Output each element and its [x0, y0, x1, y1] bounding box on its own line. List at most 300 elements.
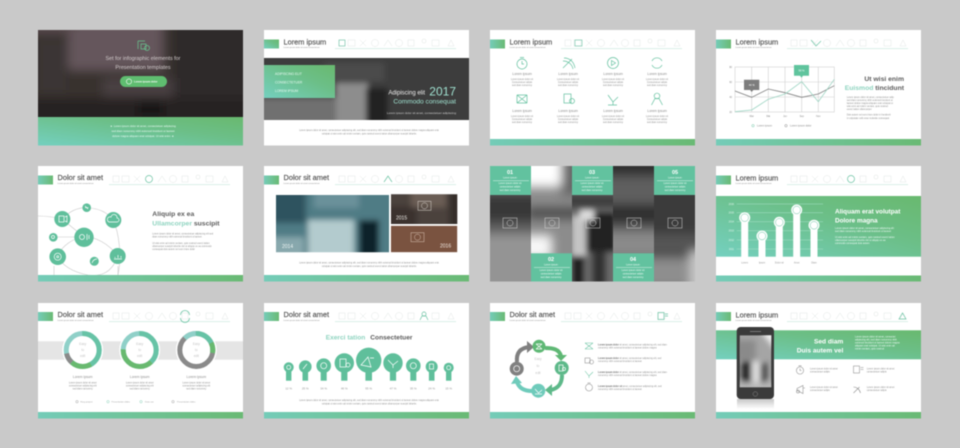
body text: Lorem ipsum dolor sit amet, consectetuer adipiscing elit	[835, 227, 894, 230]
card 05: Lorem ipsum	[668, 176, 682, 180]
box list: LOREM IPSUM	[275, 89, 298, 93]
feature text row two: sed diam nonummy	[647, 122, 668, 124]
footer text: ► Lorem ipsum dolor sit amet, consectetuer adipiscing	[110, 124, 176, 128]
lollipop chart	[729, 203, 823, 264]
list text: Lorem ipsum dolor sit amet, consectetuer adipiscing elit, sed	[598, 357, 662, 360]
caption: Lorem ipsum dolor sit amet, consectetuer adipiscing elit, sed diam nonummy nibh euismod tincidunt ut laoreet dolore magna aliquam erat	[299, 262, 439, 264]
feature text row two: Lorem ipsum	[647, 109, 667, 113]
body text: Lorem ipsum dolor sit amet, consectetuer adip	[847, 96, 895, 99]
footer bar	[264, 412, 469, 418]
donut two: edit	[137, 354, 142, 358]
band text: minim veniam, quis nostrud	[855, 348, 885, 350]
donut legend: Data use	[145, 400, 155, 404]
feature text row two: Lorem ipsum	[603, 109, 623, 113]
heading: Exerci tation	[326, 334, 365, 342]
percentages: 34 %	[320, 386, 327, 390]
panel: cover slide	[23, 15, 258, 146]
card 04: Lorem ipsum dolor sit	[622, 269, 645, 272]
body text: Ut wisi enim ad minim veniam, quis nostrud exerci tation	[152, 242, 210, 245]
feature text row one: Lorem ipsum dolor sit	[557, 78, 579, 81]
panel: pin chart slide	[264, 303, 469, 418]
icon: refresh	[652, 58, 662, 68]
lollipop chart: 2012	[729, 239, 735, 242]
box list: CONSECTETUER	[275, 80, 303, 84]
list text: Lorem ipsum dolor sit amet, consectetuer adipiscing elit, sed diam	[598, 344, 667, 346]
body text	[847, 96, 895, 120]
percentages: 25 %	[302, 386, 309, 390]
gradient footer band	[38, 117, 243, 146]
donut captions	[69, 375, 211, 390]
feature text: consectetuer adipis	[810, 370, 831, 374]
feature text row two: Consectetuer adipis	[558, 118, 579, 121]
icon: play	[608, 58, 618, 68]
percentages: 55 %	[365, 386, 372, 390]
card 01: Lorem ipsum dolor sit	[499, 182, 522, 185]
feature text row two: Consectetuer adipis	[647, 118, 668, 121]
header: Lorem ipsum dolor sit amet consectetuer	[284, 46, 320, 49]
card 05: 05	[672, 170, 678, 176]
line chart: 80	[729, 66, 733, 69]
callout: green	[794, 65, 809, 78]
card 02	[531, 253, 572, 282]
cycle diagram	[510, 340, 569, 398]
feature text row one: Consectetuer adipis	[558, 81, 579, 84]
heading: Ut wisi enim	[864, 76, 904, 83]
icon: report	[564, 94, 574, 104]
body text	[152, 232, 214, 251]
donut one: Easy	[79, 342, 87, 346]
percentages: 15 %	[445, 386, 452, 390]
feature text: Lorem ipsum dolor sit amet	[867, 386, 895, 389]
header	[38, 173, 230, 185]
feature text row one: Lorem ipsum	[558, 72, 578, 76]
callout: green: 56 %	[799, 68, 805, 72]
card 05	[654, 166, 695, 195]
feature text row one: Lorem ipsum	[603, 72, 623, 76]
donut legend: Easy project	[80, 400, 93, 404]
cover subheading: Presentation templates	[115, 65, 171, 71]
card 04: Lorem ipsum	[626, 264, 640, 266]
feature text row one: sed diam nonummy	[558, 85, 579, 87]
green chart band	[716, 196, 921, 257]
lollipop chart: Ipsum	[759, 262, 765, 264]
heading accent: Consectetuer	[370, 334, 413, 342]
line chart: Mai	[766, 115, 771, 118]
percentages: 12 %	[285, 386, 292, 390]
lollipop chart: Amet	[794, 262, 800, 264]
icon: signal	[854, 387, 860, 393]
footer bar	[38, 412, 243, 418]
icon: signal	[563, 58, 575, 69]
heading: Aliquip ex ea	[152, 211, 194, 218]
callout: grey	[744, 80, 759, 92]
lollipop chart: 2015	[729, 212, 735, 215]
donut legend: Presentation slides	[177, 400, 196, 404]
caption: volutpat ut wisi enim ad minim veniam, quis nostrud exerci tation ullamcorper suscipit lobortis	[322, 265, 417, 268]
button	[120, 76, 167, 87]
photo 2014	[275, 194, 390, 254]
panel: smartphone slide	[716, 303, 921, 418]
heading	[835, 208, 901, 224]
header	[264, 173, 456, 185]
card 05: consectetuer adipis	[665, 186, 686, 188]
body text: commodo consequat duis autem	[835, 242, 870, 245]
donut captions: Lorem ipsum dolor sit amet	[69, 382, 97, 384]
lollipop chart: Dolor sit	[775, 262, 784, 264]
header: Dolor sit amet	[284, 173, 329, 182]
list icons	[585, 343, 594, 391]
feature text row one: Lorem ipsum dolor sit	[646, 78, 668, 81]
card 01	[490, 166, 531, 195]
header: Dolor sit amet	[284, 310, 329, 319]
body text: in vulputate velit esse molestie consequat	[847, 117, 889, 120]
panel: year 2017 slide	[249, 30, 484, 146]
donut one	[62, 330, 103, 370]
year headline: Lorem ipsum dolor sit amet, consectetuer adipiscing	[387, 111, 456, 115]
footer bar	[716, 276, 921, 282]
heading: Duis autem vel	[797, 348, 843, 354]
card 01: consectetuer adipis	[500, 186, 521, 188]
list text	[598, 344, 667, 391]
lollipop chart: 2013	[729, 230, 735, 233]
cycle diagram: Easy	[534, 357, 542, 361]
body text: sed diam nonummy nibh euismod tincidunt ut laoreet	[835, 230, 891, 233]
year headline: Adipiscing elit	[388, 90, 425, 96]
lollipop chart: 2011	[729, 248, 735, 251]
body text: diam nonummy nibh euismod tincidunt ut laoreet	[152, 236, 202, 238]
card 03: 03	[589, 170, 595, 176]
grey band	[38, 341, 243, 360]
footer bar	[264, 275, 469, 282]
box list	[275, 72, 303, 93]
feature text row one: sed diam nonummy	[603, 85, 624, 87]
header: Lorem ipsum dolor sit amet consectetuer	[284, 182, 320, 185]
card 02: 02	[548, 257, 554, 263]
icon: presentation	[854, 366, 864, 373]
lollipop chart: 2014	[729, 221, 735, 224]
feature text row two	[511, 109, 668, 124]
header: Lorem ipsum dolor sit amet consectetuer	[58, 182, 94, 185]
feature text: consectetuer adipis	[867, 389, 887, 392]
year headline: 2017	[429, 84, 456, 98]
list text: nonummy nibh euismod tincidunt ut laoreet	[598, 388, 642, 391]
heading	[845, 76, 905, 92]
card 05: sed diam nonummy	[665, 189, 686, 192]
donut captions: sed diam nonummy	[186, 388, 207, 390]
card 01: Lorem ipsum	[503, 176, 517, 180]
header: Lorem ipsum dolor sit amet consectetuer	[736, 319, 772, 322]
list text: nonummy nibh euismod tincidunt ut laoreet	[598, 360, 642, 363]
panel: icon grid slide	[490, 30, 695, 146]
donut one: to	[81, 348, 84, 352]
card 02: Lorem ipsum	[544, 264, 558, 266]
card 01: sed diam nonummy	[500, 189, 521, 192]
donut captions: Lorem ipsum dolor sit amet	[182, 382, 211, 384]
header: Lorem ipsum	[736, 174, 778, 182]
header: Lorem ipsum	[736, 310, 778, 320]
line chart: Jun	[783, 115, 788, 118]
donut two	[119, 330, 160, 370]
feature text row two: Lorem ipsum	[558, 109, 578, 113]
feature text row one: sed diam nonummy	[512, 85, 533, 87]
line chart: Nov	[816, 115, 821, 118]
body text: laoreet dolore magna aliquam erat volutpat ut	[847, 102, 893, 105]
feature text row one	[511, 72, 668, 87]
footer bar	[716, 139, 921, 146]
photo 2015: 2015	[396, 215, 407, 221]
phone	[732, 327, 780, 399]
caption	[299, 262, 439, 268]
feature text row two: Lorem ipsum dolor sit	[602, 115, 624, 118]
feature text: Lorem ipsum dolor sit amet	[810, 386, 838, 389]
header: Dolor sit amet	[58, 310, 103, 319]
line chart: 60	[729, 81, 733, 84]
camera placeholders	[503, 218, 682, 228]
percentages: 47 %	[390, 386, 397, 390]
donut captions: Lorem ipsum dolor sit amet	[126, 382, 154, 384]
card 04: consectetuer adipis	[623, 272, 644, 276]
feature text row one: sed diam nonummy	[647, 85, 668, 87]
footer text: sed diam nonummy nibh euismod tincidunt ut laoreet	[112, 129, 175, 133]
icon: user	[652, 93, 662, 105]
header	[490, 310, 682, 322]
list text: Lorem ipsum dolor sit amet, consectetuer adipiscing elit, sed diam	[598, 371, 667, 374]
header: Lorem ipsum dolor sit amet consectetuer	[284, 319, 320, 322]
feature text row two: Consectetuer adipis	[603, 118, 624, 121]
donut legend: Presentation slides	[112, 400, 131, 404]
band text: aliquam erat volutpat. Ut wisi enim ad	[855, 344, 895, 348]
card 02: sed diam nonummy	[541, 276, 562, 279]
line chart: Mar	[750, 115, 754, 118]
feature text	[810, 368, 895, 392]
cover heading: Set for infographic elements for	[106, 56, 181, 62]
feature text row one: Lorem ipsum dolor sit	[511, 78, 533, 81]
icon: stopwatch	[796, 366, 804, 374]
panel: lollipop bar chart slide	[716, 166, 921, 282]
card 03: Lorem ipsum	[585, 176, 599, 180]
feature text row two: sed diam nonummy	[603, 122, 624, 124]
photo 2016	[390, 225, 458, 253]
donut captions: sed diam nonummy	[130, 388, 151, 390]
donut captions: consectetuer adipiscing elit	[183, 384, 210, 388]
panel: five photo columns slide	[475, 151, 714, 301]
card 04: sed diam nonummy	[623, 276, 644, 279]
button: Lorem ipsum dolor	[134, 80, 158, 84]
feature text: consectetuer adipis	[867, 370, 887, 374]
band text	[855, 336, 900, 350]
cycle diagram: to	[537, 364, 540, 368]
body text: Ut wisi enim ad minim veniam, quis nostrud exerci tation	[835, 236, 895, 239]
body text: Lorem ipsum dolor sit amet, consectetuer adipiscing elit sed	[152, 232, 214, 236]
body text: exerci tation ullamcorper	[847, 108, 872, 111]
header: Lorem ipsum dolor sit amet consectetuer	[510, 319, 546, 322]
feature text row one: Lorem ipsum dolor sit	[602, 78, 624, 81]
band text: adipiscing elit, sed diam nonummy nibh	[855, 338, 897, 342]
panel: donut charts slide	[38, 303, 243, 418]
feature text row two: sed diam nonummy	[558, 122, 579, 124]
body text: ullamcorper suscipit lobortis nisl ut aliquip ex ea	[835, 239, 886, 242]
header: Lorem ipsum dolor sit amet consectetuer	[736, 46, 772, 49]
donut captions: Lorem ipsum	[73, 375, 93, 379]
header	[490, 38, 682, 49]
header	[38, 310, 230, 322]
pin icons	[287, 357, 451, 370]
header: Lorem ipsum	[736, 38, 778, 46]
body text: Duis autem vel eum iriure dolor in hendrerit	[847, 114, 891, 116]
body text: wisi enim ad minim veniam, quis nostrud	[847, 105, 889, 108]
list text: nonummy nibh euismod tincidunt ut laoreet dolore magna	[598, 374, 657, 377]
feature text: Lorem ipsum dolor sit amet	[810, 368, 838, 370]
heading: Ullamcorper suscipit	[152, 220, 220, 228]
feature text row two: Lorem ipsum dolor sit	[511, 115, 533, 118]
footer text	[110, 124, 176, 138]
column five photo	[654, 194, 696, 282]
feature text row one: Consectetuer adipis	[603, 81, 624, 84]
card 05: Lorem ipsum dolor sit	[664, 182, 687, 185]
header	[716, 310, 908, 322]
donut captions: Lorem ipsum	[186, 375, 206, 379]
card 03: sed diam nonummy	[582, 189, 603, 192]
feature text row one: Lorem ipsum	[647, 72, 667, 76]
feature text: consectetuer adipis	[810, 389, 831, 392]
body text	[835, 227, 895, 245]
heading: Sed diam	[814, 338, 843, 346]
donut captions: consectetuer adipiscing elit	[126, 384, 154, 388]
list text: nonummy nibh euismod tincidunt ut laoreet dolore magna	[598, 346, 657, 350]
photo 2015	[390, 193, 458, 225]
header	[264, 310, 456, 322]
callout: grey: 44 %	[749, 83, 755, 87]
donut two: Easy	[136, 342, 144, 346]
donut captions: Lorem ipsum	[130, 375, 150, 379]
line chart: 40	[729, 96, 733, 99]
line chart: 20	[729, 111, 733, 114]
caption: Lorem ipsum dolor sit amet, consectetuer adipiscing elit, sed diam nonummy nibh euismod tincidunt ut laoreet dolore magna aliquam erat	[299, 399, 439, 402]
caption	[299, 129, 439, 136]
green band	[716, 330, 921, 359]
icon: network	[517, 95, 527, 103]
pins	[284, 348, 454, 381]
card 03	[572, 166, 613, 195]
footer text: dolore magna aliquam erat volutpat. Ut wisi enim ◄	[112, 134, 174, 138]
donut legend	[76, 400, 196, 404]
year headline	[387, 84, 456, 115]
header: Lorem ipsum	[284, 38, 326, 46]
green label box	[264, 65, 335, 98]
feature text row one: Lorem ipsum	[512, 72, 532, 76]
year headline: Commodo consequat	[393, 98, 456, 106]
column one photo	[490, 194, 532, 282]
header: Dolor sit amet	[510, 310, 555, 319]
footer bar	[38, 275, 243, 282]
feature text row two: Lorem ipsum dolor sit	[557, 115, 579, 118]
header: Lorem ipsum dolor sit amet consectetuer	[58, 319, 94, 322]
phone reflection	[737, 399, 774, 409]
blurred city photo	[38, 30, 243, 118]
panel: line chart slide	[716, 30, 921, 146]
column two photo	[530, 165, 572, 254]
caption	[299, 399, 439, 406]
header	[264, 38, 456, 49]
body text: ullamcorper suscipit lobortis nisl ut aliquip ex ea commodo	[152, 245, 212, 248]
feature text row two: sed diam nonummy	[512, 122, 533, 124]
chart legend: Lorem ipsum dolor	[790, 124, 812, 128]
chart legend	[752, 124, 812, 128]
caption: volutpat ut wisi enim ad minim veniam, quis nostrud exerci tation ullamcorper suscipit lobortis	[322, 132, 417, 136]
footer bar	[490, 412, 695, 418]
heading	[797, 338, 843, 354]
lollipop chart: 2016	[729, 203, 735, 206]
donut captions: consectetuer adipiscing elit	[69, 384, 97, 388]
panel: cycle diagram slide	[490, 303, 695, 418]
icon: chart arrows	[608, 95, 618, 105]
body text: sed diam nonummy nibh euismod tincidunt ut	[847, 99, 893, 102]
line chart	[729, 66, 834, 118]
network diagram	[38, 203, 126, 275]
donut three	[176, 330, 217, 370]
chart legend: Lorem ipsum	[757, 124, 772, 128]
percentages: 24 %	[428, 386, 435, 390]
donut two: to	[138, 348, 141, 352]
percentages	[285, 386, 452, 390]
feature text row two: Lorem ipsum dolor sit	[646, 115, 668, 118]
card 01: 01	[507, 170, 513, 176]
band text: Lorem ipsum dolor sit amet, consectet	[855, 336, 896, 338]
donut three: edit	[194, 354, 199, 358]
percentages: 46 %	[341, 386, 348, 390]
header: Lorem ipsum dolor sit amet consectetuer	[510, 46, 546, 49]
footer bar	[716, 412, 921, 418]
feature text row two: Lorem ipsum	[512, 109, 532, 113]
column four photo	[612, 166, 654, 253]
heading	[152, 211, 220, 228]
column three photo	[572, 194, 614, 282]
lollipop chart: Lorem	[741, 262, 748, 264]
photo 2014: 2014	[282, 244, 293, 250]
caption: volutpat ut wisi enim ad minim veniam, quis nostrud exerci tation ullamcorper suscipit lobortis	[322, 402, 417, 406]
card 03: Lorem ipsum dolor sit	[581, 182, 604, 185]
lollipop chart: Diam	[811, 262, 817, 264]
box list: ADIPISCING ELIT	[275, 72, 302, 76]
footer bar	[490, 139, 695, 146]
card 04: 04	[630, 257, 637, 263]
header	[716, 174, 908, 185]
percentages: 35 %	[410, 386, 417, 390]
panel: photo timeline slide	[264, 166, 474, 282]
card 03: consectetuer adipis	[582, 186, 603, 188]
heading: Euismod tincidunt	[845, 85, 905, 92]
heading: Aliquam erat volutpat	[835, 208, 901, 216]
icon: stopwatch	[517, 58, 527, 69]
header: Dolor sit amet	[58, 173, 103, 182]
heading: Dolore magna	[835, 218, 878, 224]
header: Lorem ipsum dolor sit amet consectetuer	[736, 182, 772, 185]
header: Lorem ipsum	[510, 38, 552, 46]
donut captions: sed diam nonummy	[73, 388, 94, 390]
feature text row two: Consectetuer adipis	[512, 118, 533, 121]
donut three: Easy	[193, 342, 200, 346]
feature text row one: Consectetuer adipis	[512, 81, 533, 84]
donut one: edit	[80, 354, 85, 358]
body text: consequat duis autem vel eum iriure dolor	[152, 248, 195, 251]
line chart: Sep	[800, 115, 804, 118]
feature text row one: Consectetuer adipis	[647, 81, 668, 84]
icon: megaphone	[796, 386, 805, 394]
icon: presentation chart	[138, 41, 150, 50]
header	[716, 38, 908, 49]
donut three: to	[195, 348, 198, 352]
cycle diagram: edit	[535, 371, 541, 375]
